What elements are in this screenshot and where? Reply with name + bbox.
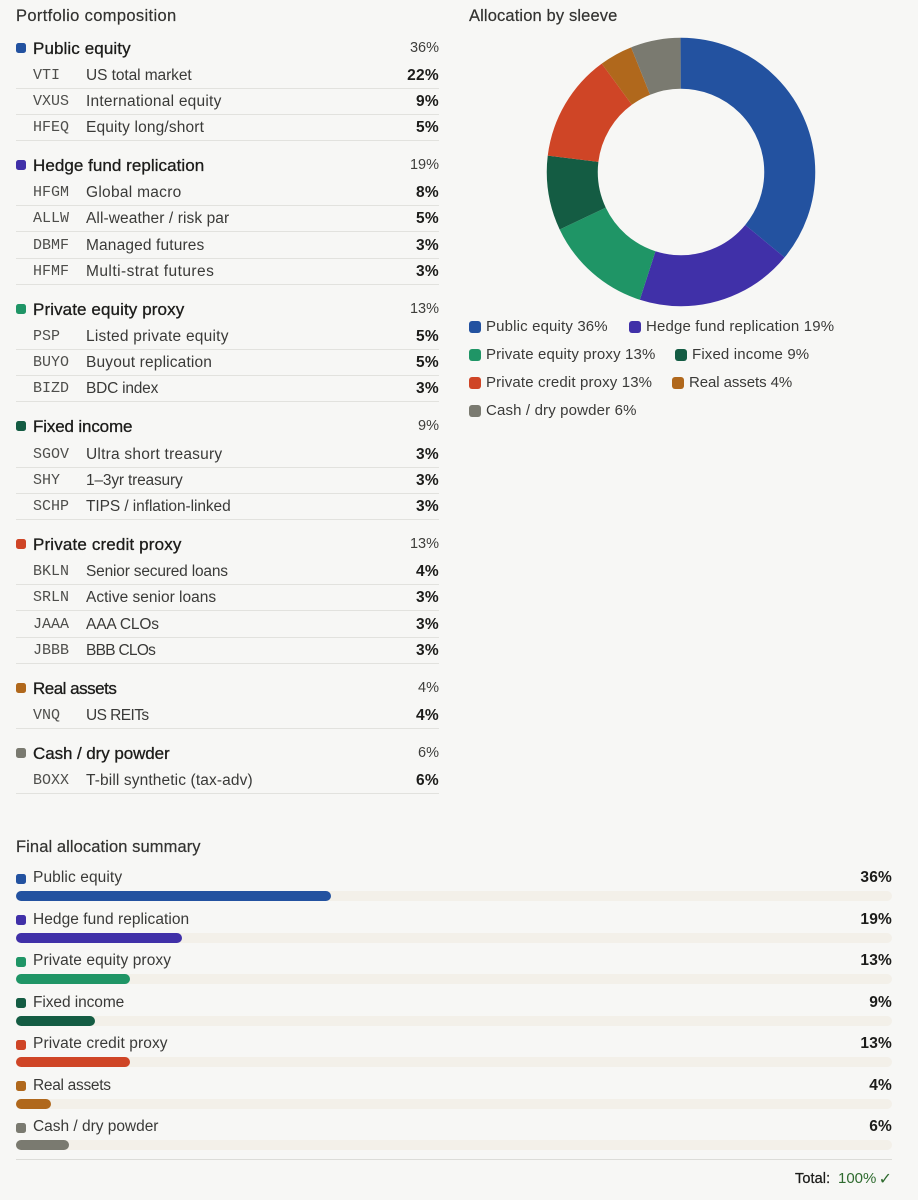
row: PSP: 5% <box>416 328 439 345</box>
legend item: public equity: Public equity 36% <box>486 318 608 335</box>
heading: final allocation summary: Final allocation summary <box>16 838 201 856</box>
row: SGOV: 3% <box>416 446 439 463</box>
row: PSP: Listed private equity <box>86 328 229 345</box>
group header: hedge fund replication: 19% <box>410 157 439 173</box>
group header: public equity <box>16 38 439 58</box>
group header: public equity: 36% <box>410 40 439 56</box>
group header: cash / dry powder <box>16 744 439 763</box>
group header: private equity proxy: 13% <box>410 301 439 317</box>
row: SCHP: TIPS / inflation-linked <box>86 498 231 515</box>
bar: hedge fund replication <box>16 910 892 943</box>
row: BUYO: Buyout replication <box>86 354 212 371</box>
row: HFEQ: 5% <box>416 119 439 136</box>
row: BUYO: 5% <box>416 354 439 371</box>
row: HFEQ: HFEQ <box>33 119 69 136</box>
row: ALLW <box>16 206 439 232</box>
group header: cash / dry powder: 6% <box>418 745 439 761</box>
row: SHY <box>16 468 439 494</box>
row: VTI: 22% <box>407 67 439 84</box>
legend item: real assets: Real assets 4% <box>689 374 792 391</box>
legend item: private credit proxy: Private credit proxy 13% <box>486 374 652 391</box>
row: VNQ: VNQ <box>33 707 60 724</box>
row: BUYO <box>16 350 439 376</box>
legend: allocation by sleeve <box>469 318 834 419</box>
row: VNQ <box>16 703 439 729</box>
row: VTI <box>16 63 439 89</box>
row: DBMF: Managed futures <box>86 237 204 254</box>
group header: private equity proxy: Private equity proxy <box>33 300 184 318</box>
row: DBMF <box>16 233 439 259</box>
group header: private credit proxy: 13% <box>410 536 439 552</box>
row: JAAA: JAAA <box>33 616 69 633</box>
row: VXUS: International equity <box>86 93 222 110</box>
bar: cash / dry powder <box>16 1118 892 1150</box>
row: JAAA <box>16 612 439 638</box>
legend item: fixed income: Fixed income 9% <box>692 346 809 363</box>
row: VTI: VTI <box>33 67 60 84</box>
group header: real assets <box>16 678 439 698</box>
row: HFMF: HFMF <box>33 263 69 280</box>
total row: 100% <box>838 1170 876 1187</box>
row: BIZD <box>16 376 439 402</box>
row: SRLN: SRLN <box>33 589 69 606</box>
row: VNQ: 4% <box>416 707 439 724</box>
row: SGOV: SGOV <box>33 446 69 463</box>
bar: cash / dry powder: 6% <box>869 1118 892 1135</box>
row: BOXX: BOXX <box>33 772 69 789</box>
row: HFGM <box>16 180 439 206</box>
group header: real assets: 4% <box>418 680 439 696</box>
panel: final allocation summary bars <box>16 869 892 1150</box>
row: BIZD: BDC index <box>86 380 158 397</box>
bar: public equity: Public equity <box>33 869 122 886</box>
bar: private credit proxy: Private credit proxy <box>33 1035 168 1052</box>
donut chart: allocation by sleeve <box>546 38 816 306</box>
bar: cash / dry powder: Cash / dry powder <box>33 1118 158 1135</box>
bar: fixed income: Fixed income <box>33 994 124 1010</box>
row: SRLN: Active senior loans <box>86 589 216 606</box>
row: BIZD: BIZD <box>33 380 69 397</box>
row: JAAA: 3% <box>416 616 439 633</box>
row: HFMF: Multi-strat futures <box>86 263 214 280</box>
bar: public equity <box>16 869 892 901</box>
group header: fixed income: Fixed income <box>33 416 132 436</box>
group header: fixed income <box>16 416 439 436</box>
panel: portfolio composition list <box>16 38 439 794</box>
row: BIZD: 3% <box>416 380 439 397</box>
group header: fixed income: 9% <box>418 418 439 434</box>
row: ALLW: ALLW <box>33 210 69 227</box>
group header: real assets: Real assets <box>33 678 116 698</box>
row: BOXX: T-bill synthetic (tax-adv) <box>86 772 253 789</box>
group header: private credit proxy <box>16 534 439 554</box>
row: SHY: SHY <box>33 472 60 489</box>
heading: portfolio composition: Portfolio composition <box>16 7 177 25</box>
row: BUYO: BUYO <box>33 354 69 371</box>
bar: hedge fund replication: 19% <box>860 910 892 928</box>
row: SGOV <box>16 442 439 468</box>
row: VXUS <box>16 89 439 115</box>
row: BKLN <box>16 559 439 585</box>
group header: public equity: Public equity <box>33 38 131 58</box>
row: SHY: 1–3yr treasury <box>86 472 183 489</box>
total row: ✓ <box>879 1169 892 1188</box>
row: PSP <box>16 324 439 350</box>
row: ALLW: 5% <box>416 210 439 227</box>
bar: private credit proxy: 13% <box>860 1035 892 1052</box>
bar: real assets: Real assets <box>33 1076 111 1094</box>
bar: private credit proxy <box>16 1035 892 1067</box>
row: SCHP <box>16 494 439 520</box>
bar: real assets: 4% <box>869 1076 892 1094</box>
row: HFMF <box>16 259 439 285</box>
total row <box>795 1169 892 1188</box>
group header: hedge fund replication: Hedge fund replication <box>33 156 204 174</box>
row: JBBB <box>16 638 439 664</box>
row: SGOV: Ultra short treasury <box>86 446 222 463</box>
row: BKLN: BKLN <box>33 563 69 580</box>
row: ALLW: All-weather / risk par <box>86 210 229 227</box>
row: SRLN <box>16 585 439 611</box>
row: VTI: US total market <box>86 67 192 84</box>
row: HFMF: 3% <box>416 263 439 280</box>
row: JBBB: 3% <box>416 642 439 659</box>
row: SCHP: 3% <box>416 498 439 515</box>
bar: fixed income: 9% <box>869 994 892 1010</box>
row: PSP: PSP <box>33 328 60 345</box>
row: SHY: 3% <box>416 472 439 489</box>
row: VXUS: 9% <box>416 93 439 110</box>
row: HFEQ <box>16 115 439 141</box>
bar: public equity: 36% <box>860 869 892 886</box>
row: BKLN: 4% <box>416 563 439 580</box>
row: BKLN: Senior secured loans <box>86 563 228 580</box>
row: HFGM: Global macro <box>86 184 182 201</box>
row: VXUS: VXUS <box>33 93 69 110</box>
row: BOXX: 6% <box>416 772 439 789</box>
bar: private equity proxy: 13% <box>860 952 892 969</box>
group header: private equity proxy <box>16 300 439 319</box>
row: DBMF: DBMF <box>33 237 69 254</box>
legend item: cash / dry powder: Cash / dry powder 6% <box>486 402 637 419</box>
bar: private equity proxy: Private equity proxy <box>33 952 171 969</box>
row: SCHP: SCHP <box>33 498 69 515</box>
row: JBBB: BBB CLOs <box>86 642 155 659</box>
legend item: private equity proxy: Private equity proxy 13% <box>486 346 656 363</box>
row: HFEQ: Equity long/short <box>86 119 204 136</box>
total row: Total: <box>795 1171 830 1187</box>
bar: hedge fund replication: Hedge fund replication <box>33 910 189 928</box>
bar: fixed income <box>16 994 892 1026</box>
row: BOXX <box>16 768 439 794</box>
bar: private equity proxy <box>16 952 892 984</box>
row: HFGM: HFGM <box>33 184 69 201</box>
row: DBMF: 3% <box>416 237 439 254</box>
group header: hedge fund replication <box>16 156 439 175</box>
row: SRLN: 3% <box>416 589 439 606</box>
row: VNQ: US REITs <box>86 707 149 724</box>
legend item: hedge fund replication: Hedge fund replication 19% <box>646 318 834 335</box>
row: JBBB: JBBB <box>33 642 69 659</box>
group header: private credit proxy: Private credit proxy <box>33 534 182 554</box>
bar: real assets <box>16 1076 892 1109</box>
row: HFGM: 8% <box>416 184 439 201</box>
row: JAAA: AAA CLOs <box>86 616 159 633</box>
group header: cash / dry powder: Cash / dry powder <box>33 744 170 762</box>
heading: allocation by sleeve: Allocation by sleeve <box>469 7 617 25</box>
